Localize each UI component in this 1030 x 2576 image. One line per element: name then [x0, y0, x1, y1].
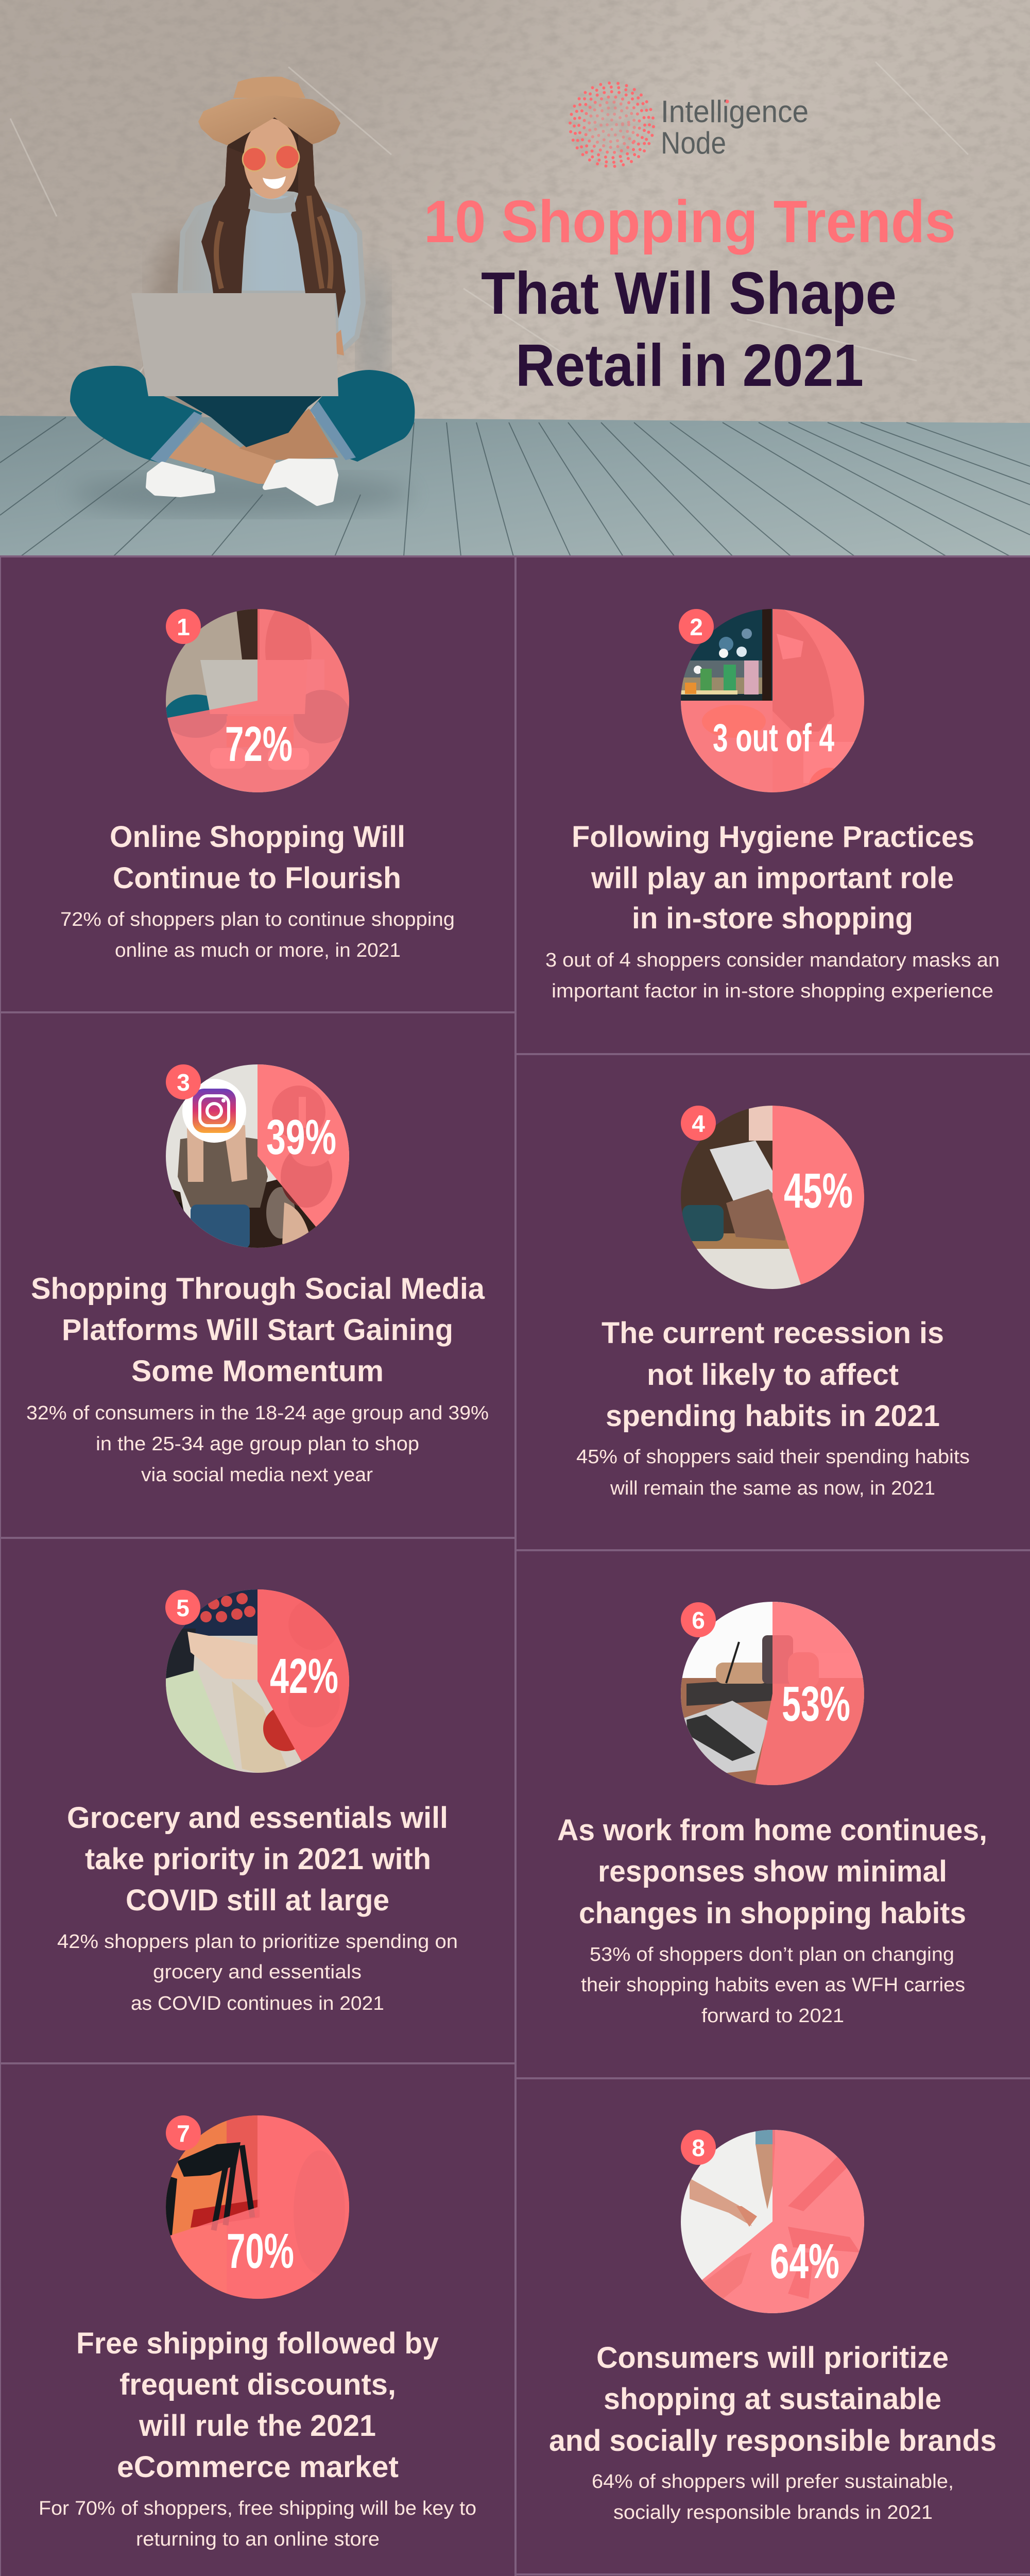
- body text: [592, 2471, 954, 2523]
- heading: take priority in 2021 with: [85, 1842, 431, 1876]
- wall background: [0, 0, 1030, 425]
- pie photo: 53%: [681, 1602, 864, 1786]
- body text: [581, 1944, 965, 2027]
- number badge 5: [165, 1590, 200, 1625]
- number badge 7: [166, 2115, 201, 2150]
- body text: 64% of shoppers will prefer sustainable,: [592, 2471, 954, 2493]
- body text: forward to 2021: [701, 2005, 844, 2027]
- body text: 32% of consumers in the 18-24 age group and 39%: [26, 1402, 489, 1424]
- heading: Some Momentum: [131, 1354, 384, 1388]
- body text: as COVID continues in 2021: [131, 1993, 384, 2014]
- number badge 8: [681, 2130, 716, 2165]
- body text: socially responsible brands in 2021: [613, 2502, 933, 2523]
- number badge 6: [681, 1602, 716, 1637]
- body text: online as much or more, in 2021: [115, 940, 401, 961]
- body text: important factor in in-store shopping experience: [552, 980, 993, 1002]
- body text: [576, 1446, 970, 1499]
- heading: [549, 2341, 997, 2458]
- heading: [76, 2327, 439, 2484]
- heading: not likely to affect: [647, 1358, 899, 1392]
- heading: The current recession is: [602, 1316, 944, 1350]
- title: That Will Shape: [481, 260, 897, 327]
- pie photo: 45%: [681, 1106, 864, 1290]
- body text: 45% of shoppers said their spending habits: [576, 1446, 970, 1468]
- pie photo: 64%: [681, 2130, 864, 2313]
- heading: Platforms Will Start Gaining: [62, 1313, 453, 1347]
- panel: trend 8: [516, 2078, 1030, 2574]
- body text: 42% shoppers plan to prioritize spending on: [57, 1931, 458, 1953]
- heading: changes in shopping habits: [579, 1896, 966, 1930]
- heading: spending habits in 2021: [606, 1399, 940, 1433]
- body text: their shopping habits even as WFH carries: [581, 1974, 965, 1996]
- heading: Consumers will prioritize: [596, 2341, 949, 2375]
- percent 53%: 53%: [782, 1676, 850, 1732]
- number badge 2: 2: [690, 614, 703, 640]
- hero banner: [0, 0, 1030, 556]
- panel: trend 10: [516, 2574, 1030, 2576]
- heading: Online Shopping Will: [110, 820, 405, 854]
- floor boards: [0, 416, 1030, 556]
- percent 64%: 64%: [770, 2234, 839, 2289]
- heading: will rule the 2021: [139, 2409, 376, 2443]
- panel: trend 6: [558, 1602, 986, 2023]
- woman with laptop photo: [70, 77, 415, 503]
- pie photo: 3 out of 4: [681, 609, 865, 809]
- title: Retail in 2021: [516, 332, 864, 399]
- percent 72%: 72%: [225, 717, 293, 772]
- body text: [545, 950, 1000, 1002]
- heading: Shopping Through Social Media: [31, 1272, 485, 1306]
- heading: [557, 1814, 987, 1930]
- number badge 1: [166, 609, 201, 644]
- title: [424, 188, 956, 399]
- number badge 5: 5: [176, 1595, 190, 1621]
- percent 39%: 39%: [266, 1110, 336, 1165]
- percent 45%: 45%: [784, 1163, 853, 1218]
- heading: and socially responsible brands: [549, 2424, 997, 2458]
- panel: trend 2: [517, 555, 1030, 1002]
- number badge 6: 6: [692, 1607, 705, 1634]
- body text: 72% of shoppers plan to continue shopping: [60, 909, 455, 930]
- percent 42%: 42%: [270, 1649, 338, 1704]
- heading: shopping at sustainable: [604, 2382, 941, 2416]
- heading: Following Hygiene Practices: [572, 820, 974, 854]
- percent 70%: 70%: [227, 2224, 294, 2279]
- pie photo: 72%: [164, 603, 350, 793]
- heading: [602, 1316, 944, 1433]
- heading: As work from home continues,: [557, 1814, 987, 1847]
- number badge 8: 8: [692, 2134, 705, 2161]
- title: 10 Shopping Trends: [424, 188, 956, 255]
- panel: trend 4: [577, 1106, 969, 1497]
- number badge 4: 4: [692, 1110, 705, 1137]
- heading: will play an important role: [591, 861, 954, 895]
- number badge 7: 7: [177, 2120, 190, 2147]
- body text: 53% of shoppers don’t plan on changing: [590, 1944, 954, 1965]
- heading: Free shipping followed by: [76, 2327, 439, 2360]
- logo: Intelligence Node: Intelligence: [661, 94, 809, 129]
- body text: grocery and essentials: [153, 1961, 362, 1983]
- heading: eCommerce market: [117, 2450, 399, 2484]
- body text: in the 25-34 age group plan to shop: [96, 1433, 419, 1455]
- pie photo: 39%: [166, 1064, 349, 1249]
- panel: trend 3: [0, 1012, 516, 1538]
- body text: [57, 1931, 458, 2014]
- panel: trend 7: [0, 2063, 516, 2576]
- number badge 2: [679, 609, 714, 644]
- body text: returning to an online store: [136, 2529, 380, 2550]
- panel: trend 1: [0, 556, 516, 1012]
- body text: via social media next year: [141, 1464, 373, 1486]
- panel: trend 5: [0, 1539, 456, 2062]
- body text: 3 out of 4 shoppers consider mandatory masks an: [545, 950, 1000, 971]
- number badge 1: 1: [177, 614, 190, 640]
- pie photo: 70%: [166, 2115, 350, 2299]
- heading: in in-store shopping: [632, 902, 913, 935]
- number badge 3: 3: [177, 1069, 190, 1096]
- heading: [572, 820, 974, 935]
- heading: [110, 820, 405, 895]
- body text: [39, 2498, 476, 2550]
- heading: [31, 1272, 485, 1388]
- body text: [60, 909, 455, 961]
- body text: [26, 1402, 489, 1486]
- heading: responses show minimal: [598, 1855, 947, 1888]
- heading: frequent discounts,: [119, 2368, 396, 2401]
- number badge 3: [166, 1064, 201, 1099]
- logo: Intelligence Node: [553, 66, 809, 183]
- heading: [67, 1801, 448, 1917]
- body text: will remain the same as now, in 2021: [610, 1478, 935, 1499]
- body text: For 70% of shoppers, free shipping will be key to: [39, 2498, 476, 2519]
- heading: COVID still at large: [126, 1884, 389, 1917]
- heading: Grocery and essentials will: [67, 1801, 448, 1835]
- pie photo: 42%: [166, 1589, 349, 1773]
- logo: Intelligence Node: Node: [661, 126, 726, 160]
- heading: Continue to Flourish: [113, 861, 401, 895]
- number badge 4: [681, 1106, 716, 1141]
- stat 3 out of 4: 3 out of 4: [713, 716, 834, 760]
